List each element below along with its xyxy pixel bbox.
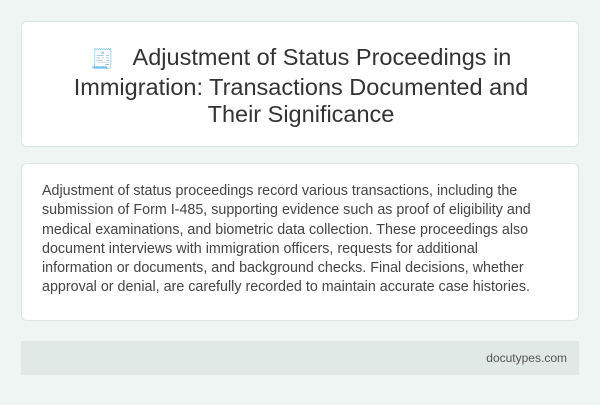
footer bar — [21, 341, 579, 375]
title panel — [21, 21, 579, 147]
title: 🧾 Adjustment of Status Proceedings in Immigration: Transactions Documented and Their Significance — [74, 44, 528, 127]
footer text: docutypes.com — [486, 351, 567, 365]
description text: Adjustment of status proceedings record various transactions, including the submission of Form I-485, supporting evidence such as proof of eligibility and medical examinations, and biometric data collection. These proceedings also document interviews with immigration officers, requests for additional information or documents, and background checks. Final decisions, whether approval or denial, are carefully recorded to maintain accurate case histories. — [42, 183, 531, 295]
description panel — [21, 163, 579, 321]
